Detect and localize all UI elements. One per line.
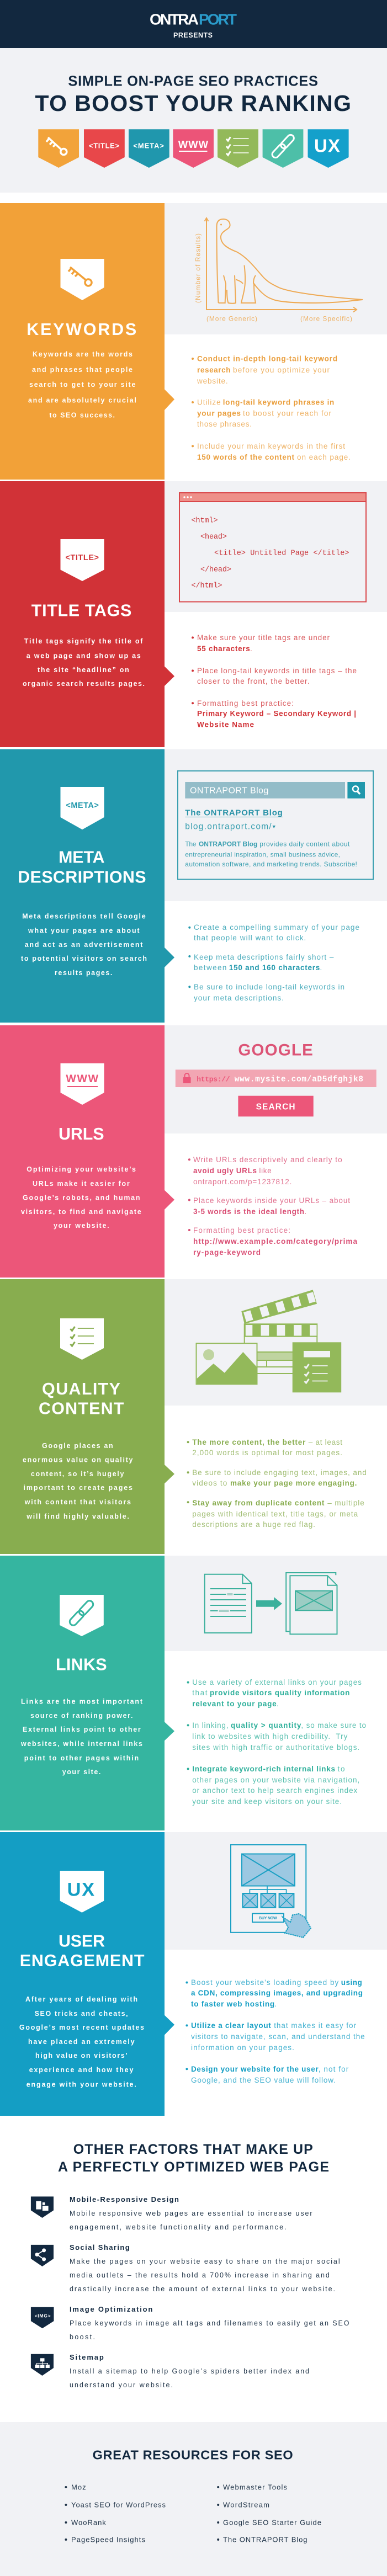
description: and are absolutely crucial bbox=[28, 396, 136, 404]
tips list: long-tail keyword phrases in bbox=[223, 398, 334, 406]
icon: www badge bbox=[173, 129, 214, 168]
tips list: before you optimize your bbox=[233, 366, 330, 374]
tips list: provide visitors quality information bbox=[210, 1689, 349, 1697]
search result mockup: provides daily content about bbox=[259, 840, 350, 848]
tips list: In linking, bbox=[192, 1721, 229, 1729]
icon: title badge bbox=[61, 539, 104, 581]
tips list: Include your main keywords in the first bbox=[197, 442, 345, 450]
tips list: between bbox=[194, 964, 226, 972]
tips list: Formatting best practice: bbox=[193, 1226, 290, 1234]
description: content, so it’s hugely bbox=[31, 1470, 124, 1478]
heading: CONTENT bbox=[39, 1399, 124, 1418]
heading bbox=[20, 1931, 145, 1970]
factor: sitemap: understand your website. bbox=[70, 2381, 173, 2389]
tips list: visitors to navigate, scan, and understand the bbox=[191, 2032, 365, 2041]
description bbox=[20, 1697, 143, 1776]
panel: meta descriptions bbox=[0, 749, 387, 1023]
tips list: 2,000 words is optimal for most pages. bbox=[192, 1449, 342, 1457]
tips list: Integrate keyword-rich internal links bbox=[192, 1765, 335, 1773]
description: Google’s robots, and human bbox=[23, 1194, 140, 1202]
icon: lock bbox=[183, 1073, 191, 1083]
description: to potential visitors on search bbox=[21, 955, 147, 962]
tips list: , not for bbox=[319, 2065, 349, 2073]
search result mockup: ONTRAPORT Blog bbox=[199, 840, 257, 848]
panel: links bbox=[0, 1556, 387, 1830]
description bbox=[23, 1442, 133, 1520]
tips list: descriptions are a huge red flag. bbox=[192, 1520, 315, 1529]
factor: social sharing: media outlets – the results hold a 700% increase in sharing and bbox=[70, 2271, 330, 2279]
icon: www badge: WWW bbox=[178, 139, 209, 150]
description: high value on visitors’ bbox=[35, 2052, 128, 2059]
tips list: your meta descriptions. bbox=[194, 994, 284, 1002]
heading: OTHER FACTORS THAT MAKE UP bbox=[73, 2142, 313, 2157]
icon: checklist badge bbox=[218, 129, 258, 168]
heading: LINKS bbox=[56, 1656, 107, 1674]
title area bbox=[0, 48, 387, 193]
icon: hand cursor bbox=[283, 1914, 311, 1938]
tips list: Place keywords inside your URLs – about bbox=[193, 1196, 350, 1205]
tips list: to boost your reach for bbox=[243, 409, 331, 417]
description bbox=[23, 637, 145, 688]
description: enormous value on quality bbox=[23, 1456, 133, 1463]
tips list: . bbox=[275, 2000, 277, 2008]
resource list bbox=[65, 2483, 321, 2544]
search result mockup: The ONTRAPORT Blog bbox=[185, 808, 283, 818]
description: Optimizing your website’s bbox=[26, 1165, 136, 1173]
tips list: ontraport.com/p=1237812. bbox=[193, 1178, 291, 1186]
factor: image optimization: <IMG> bbox=[35, 2313, 51, 2319]
tips list: avoid ugly URLs bbox=[193, 1167, 257, 1175]
tips list: pages with identical text, title tags, or meta bbox=[192, 1510, 358, 1518]
factor: sitemap: Install a sitemap to help Google’s spiders better index and bbox=[70, 2367, 309, 2375]
browser window with code: </head> bbox=[200, 566, 231, 574]
icon: www badge bbox=[61, 1063, 104, 1105]
section: other factors bbox=[31, 2142, 349, 2389]
tips list bbox=[192, 634, 357, 728]
tips list: quality > quantity bbox=[231, 1721, 301, 1729]
tips list: that people will want to click. bbox=[194, 934, 306, 942]
tips list: that bbox=[192, 1689, 208, 1697]
tips list bbox=[188, 1156, 357, 1257]
header band bbox=[0, 0, 387, 48]
chart: long-tail dinosaur bbox=[204, 218, 363, 312]
icon: meta badge: <META> bbox=[133, 141, 164, 150]
tips list: to faster web hosting bbox=[191, 2000, 274, 2008]
resource list: The ONTRAPORT Blog bbox=[223, 2535, 307, 2544]
tips list: those phrases. bbox=[197, 420, 252, 428]
chart labels: (Number of Results) bbox=[194, 233, 202, 303]
chart labels: (More Specific) bbox=[300, 315, 352, 322]
resource list: WooRank bbox=[71, 2519, 106, 2526]
description: have placed an extremely bbox=[28, 2038, 135, 2046]
tips list: Conduct in-depth long-tail keyword bbox=[197, 354, 337, 363]
tips list: relevant to your page bbox=[192, 1700, 277, 1708]
chart labels bbox=[194, 233, 352, 322]
icon: ux badge bbox=[308, 129, 349, 168]
tips list: to bbox=[338, 1765, 344, 1773]
title bbox=[35, 74, 351, 116]
resource list: PageSpeed Insights bbox=[71, 2535, 145, 2544]
description: Title tags signify the title of bbox=[24, 637, 143, 645]
description: experience and how they bbox=[29, 2066, 133, 2074]
description: what your pages are about bbox=[28, 927, 140, 935]
description: to SEO success. bbox=[49, 411, 115, 419]
panel: keywords bbox=[0, 203, 387, 480]
illustration: page wireframe with cursor: BUY NOW bbox=[259, 1917, 277, 1920]
description: engage with your website. bbox=[26, 2080, 136, 2088]
tips list: Boost your website’s loading speed by bbox=[191, 1978, 339, 1987]
tips list: . bbox=[320, 964, 322, 972]
description: and act as an advertisement bbox=[25, 941, 143, 949]
tips list: Google, and the SEO value will follow. bbox=[191, 2076, 336, 2084]
description: Keywords are the words bbox=[33, 350, 132, 358]
illustration: linked documents bbox=[205, 1573, 337, 1634]
tips list: The more content, the better bbox=[192, 1438, 306, 1446]
tips list: . bbox=[250, 645, 252, 653]
description: point to other pages within bbox=[24, 1754, 139, 1762]
description: Links are the most important bbox=[21, 1697, 143, 1705]
tips list: . bbox=[305, 1207, 306, 1216]
google search mockup bbox=[176, 1041, 377, 1116]
title: TO BOOST YOUR RANKING bbox=[35, 91, 351, 116]
tips list: Keep meta descriptions fairly short – bbox=[194, 953, 334, 961]
tips list: 3-5 words is the ideal length bbox=[193, 1207, 304, 1216]
tips list: link to websites with high credibility. Try bbox=[192, 1732, 348, 1741]
description: important to create pages bbox=[23, 1484, 132, 1492]
resource list: Google SEO Starter Guide bbox=[223, 2519, 321, 2526]
description bbox=[21, 913, 147, 977]
icon: title badge: <TITLE> bbox=[65, 553, 99, 562]
tips list: http://www.example.com/category/prima bbox=[193, 1237, 357, 1246]
icon: www badge: WWW bbox=[66, 1073, 99, 1085]
resource list: WordStream bbox=[223, 2501, 269, 2509]
tips list: Utilize bbox=[197, 398, 221, 406]
heading: ENGAGEMENT bbox=[20, 1951, 145, 1970]
tips list: – multiple bbox=[327, 1499, 364, 1507]
tips list: videos to bbox=[192, 1479, 227, 1487]
description: your site. bbox=[62, 1768, 100, 1776]
heading bbox=[18, 848, 146, 886]
tips list: 55 characters bbox=[197, 645, 250, 653]
tips list: a CDN, compressing images, and upgrading bbox=[191, 1989, 363, 1997]
description: URLs make it easier for bbox=[33, 1180, 130, 1188]
factor: image optimization: Place keywords in image alt tags and filenames to easily get an SEO bbox=[70, 2319, 349, 2327]
factor: mobile-responsive design: engagement, website functionality and performance. bbox=[70, 2223, 287, 2231]
factor: social sharing: Make the pages on your website easy to share on the major social bbox=[70, 2258, 340, 2265]
icon: ux badge: UX bbox=[67, 1880, 94, 1901]
factor: sitemap: Sitemap bbox=[70, 2353, 104, 2361]
resource list: Webmaster Tools bbox=[223, 2483, 287, 2491]
tips list: – at least bbox=[309, 1438, 342, 1446]
browser window with code: </html> bbox=[191, 582, 222, 590]
tips list: 150 words of the content bbox=[197, 453, 295, 461]
logo: PORT bbox=[199, 11, 237, 28]
heading: GREAT RESOURCES FOR SEO bbox=[93, 2448, 293, 2462]
heading: META bbox=[59, 848, 105, 866]
browser window with code: <title> Untitled Page </title> bbox=[214, 550, 349, 557]
tips list: Create a compelling summary of your page bbox=[194, 923, 359, 932]
description: search to get to your site bbox=[29, 381, 135, 388]
factor: sitemap bbox=[31, 2353, 309, 2389]
browser window with code bbox=[179, 493, 366, 602]
icon: title badge bbox=[84, 129, 125, 168]
google search mockup: https:// bbox=[197, 1075, 230, 1084]
google search mockup: GOOGLE bbox=[238, 1041, 313, 1060]
tips list: other pages on your website via navigation, bbox=[192, 1776, 359, 1784]
search result mockup: blog.ontraport.com/ bbox=[185, 822, 272, 831]
heading: QUALITY bbox=[42, 1380, 120, 1398]
logo bbox=[150, 11, 237, 28]
icon: links badge bbox=[263, 129, 303, 168]
icon: ux badge: UX bbox=[314, 136, 340, 156]
tips list: ry-page-keyword bbox=[193, 1248, 261, 1257]
tips list: using bbox=[341, 1978, 362, 1987]
tips list: that makes it easy for bbox=[274, 2021, 357, 2030]
tips list: Make sure your title tags are under bbox=[197, 634, 330, 642]
title: SIMPLE ON-PAGE SEO PRACTICES bbox=[68, 74, 318, 89]
icon: meta badge bbox=[129, 129, 169, 168]
tips list bbox=[188, 923, 359, 1002]
tips list: make your page more engaging. bbox=[230, 1479, 357, 1487]
description bbox=[19, 1995, 144, 2088]
icon: meta badge bbox=[61, 787, 104, 829]
search result mockup: The bbox=[185, 840, 197, 848]
factor: mobile-responsive design bbox=[31, 2195, 312, 2231]
factor: image optimization bbox=[31, 2305, 349, 2341]
description: and phrases that people bbox=[32, 366, 132, 374]
icon: title badge: <TITLE> bbox=[89, 141, 119, 150]
description: After years of dealing with bbox=[25, 1995, 137, 2003]
tips list: Be sure to include long-tail keywords in bbox=[194, 983, 344, 991]
browser window with code: <head> bbox=[200, 533, 227, 541]
description: Google places an bbox=[42, 1442, 113, 1450]
description: organic search results pages. bbox=[23, 680, 145, 688]
tips list: sites with high traffic or authoritative blogs. bbox=[192, 1743, 359, 1752]
tips list: Primary Keyword – Secondary Keyword | bbox=[197, 710, 356, 718]
search result mockup: entrepreneurial inspiration, small business advice, bbox=[185, 851, 340, 859]
tips list bbox=[192, 354, 351, 461]
tips list: Website Name bbox=[197, 720, 254, 728]
icon: checklist badge bbox=[60, 1318, 104, 1360]
description: a web page and show up as bbox=[26, 652, 141, 659]
description: websites, while internal links bbox=[20, 1740, 142, 1748]
factor: social sharing: drastically increase the amount of external links to your website. bbox=[70, 2285, 335, 2293]
chart labels: (More Generic) bbox=[206, 315, 257, 322]
resource list: Moz bbox=[71, 2483, 86, 2491]
heading: DESCRIPTIONS bbox=[18, 867, 146, 886]
panel: resources bbox=[0, 2422, 387, 2576]
tips list: Utilize a clear layout bbox=[191, 2021, 271, 2030]
browser window with code: <html> bbox=[191, 517, 218, 525]
factor: social sharing: Social Sharing bbox=[70, 2243, 130, 2252]
description: with content that visitors bbox=[24, 1498, 131, 1506]
icon: links badge bbox=[60, 1595, 104, 1636]
tips list: your pages bbox=[197, 409, 241, 417]
tips list: closer to the front, the better. bbox=[197, 677, 310, 685]
icon: ux badge bbox=[60, 1871, 104, 1913]
tips list: Place long-tail keywords in title tags – the bbox=[197, 667, 357, 675]
tips list bbox=[187, 1438, 367, 1529]
illustration: clapperboard, image and document bbox=[197, 1290, 341, 1392]
google search mockup: www.mysite.com/aD5dfghjk8 bbox=[235, 1075, 363, 1084]
tips list: or anchor text to help search engines index bbox=[192, 1786, 358, 1795]
tips list: on each page. bbox=[297, 453, 351, 461]
description: source of ranking power. bbox=[30, 1712, 132, 1720]
description: visitors, to find and navigate bbox=[21, 1208, 141, 1216]
tips list: Stay away from duplicate content bbox=[192, 1499, 325, 1507]
tips list: like bbox=[259, 1167, 272, 1175]
panel: title tags bbox=[0, 481, 387, 747]
icon: key badge bbox=[38, 129, 79, 168]
panel: urls bbox=[0, 1025, 387, 1278]
logo: ONTRA bbox=[150, 11, 199, 28]
icon: key bbox=[61, 259, 104, 300]
tips list: 150 and 160 characters bbox=[229, 964, 320, 972]
tips list: website. bbox=[197, 377, 228, 385]
search result mockup bbox=[178, 771, 373, 880]
presents label: PRESENTS bbox=[173, 31, 213, 39]
panel: user engagement bbox=[0, 1832, 387, 2116]
description: Meta descriptions tell Google bbox=[22, 913, 146, 920]
heading: URLS bbox=[59, 1125, 104, 1143]
icon row bbox=[38, 129, 349, 168]
factor: mobile-responsive design: Mobile responsive web pages are essential to increase user bbox=[70, 2210, 312, 2217]
tips list: research bbox=[197, 366, 231, 374]
search result mockup: automation software, and marketing trends. Subscribe! bbox=[185, 860, 357, 868]
description bbox=[28, 350, 136, 419]
tips list: Be sure to include engaging text, images, and bbox=[192, 1468, 367, 1477]
tips list: your site and keep visitors on your site. bbox=[192, 1797, 342, 1806]
heading bbox=[39, 1380, 124, 1418]
tips list: . bbox=[277, 1700, 279, 1708]
tips list: information on your pages. bbox=[191, 2043, 294, 2052]
tips list: Design your website for the user bbox=[191, 2065, 319, 2073]
tips list bbox=[187, 1678, 366, 1806]
description: Google’s most recent updates bbox=[19, 2024, 144, 2031]
resource list: Yoast SEO for WordPress bbox=[71, 2501, 166, 2509]
panel: quality content bbox=[0, 1279, 387, 1554]
tips list: Write URLs descriptively and clearly to bbox=[193, 1156, 342, 1164]
description: will find highly valuable. bbox=[26, 1513, 129, 1520]
tips list: Formatting best practice: bbox=[197, 699, 294, 707]
description: External links point to other bbox=[23, 1726, 141, 1733]
description: SEO tricks and cheats, bbox=[35, 2010, 128, 2018]
factor: image optimization: boost. bbox=[70, 2333, 95, 2341]
factor: image optimization: Image Optimization bbox=[70, 2305, 152, 2313]
heading: KEYWORDS bbox=[26, 320, 136, 339]
factor: social sharing bbox=[31, 2243, 340, 2293]
description: your website. bbox=[54, 1222, 109, 1230]
heading: USER bbox=[59, 1931, 105, 1950]
heading: TITLE TAGS bbox=[31, 601, 131, 620]
factor: mobile-responsive design: Mobile-Responsive Design bbox=[70, 2195, 179, 2204]
description bbox=[21, 1165, 141, 1230]
icon: meta badge: <META> bbox=[66, 801, 99, 810]
google search mockup: SEARCH bbox=[256, 1103, 295, 1111]
tips list bbox=[185, 1978, 365, 2084]
description: the site “headline” on bbox=[38, 666, 129, 674]
illustration: page wireframe with cursor bbox=[231, 1845, 311, 1938]
search result mockup: ONTRAPORT Blog bbox=[190, 786, 268, 796]
heading: A PERFECTLY OPTIMIZED WEB PAGE bbox=[58, 2159, 329, 2175]
tips list: , so make sure to bbox=[301, 1721, 366, 1729]
tips list: Use a variety of external links on your pages bbox=[192, 1678, 362, 1686]
description: results pages. bbox=[55, 969, 112, 977]
heading bbox=[58, 2142, 329, 2175]
